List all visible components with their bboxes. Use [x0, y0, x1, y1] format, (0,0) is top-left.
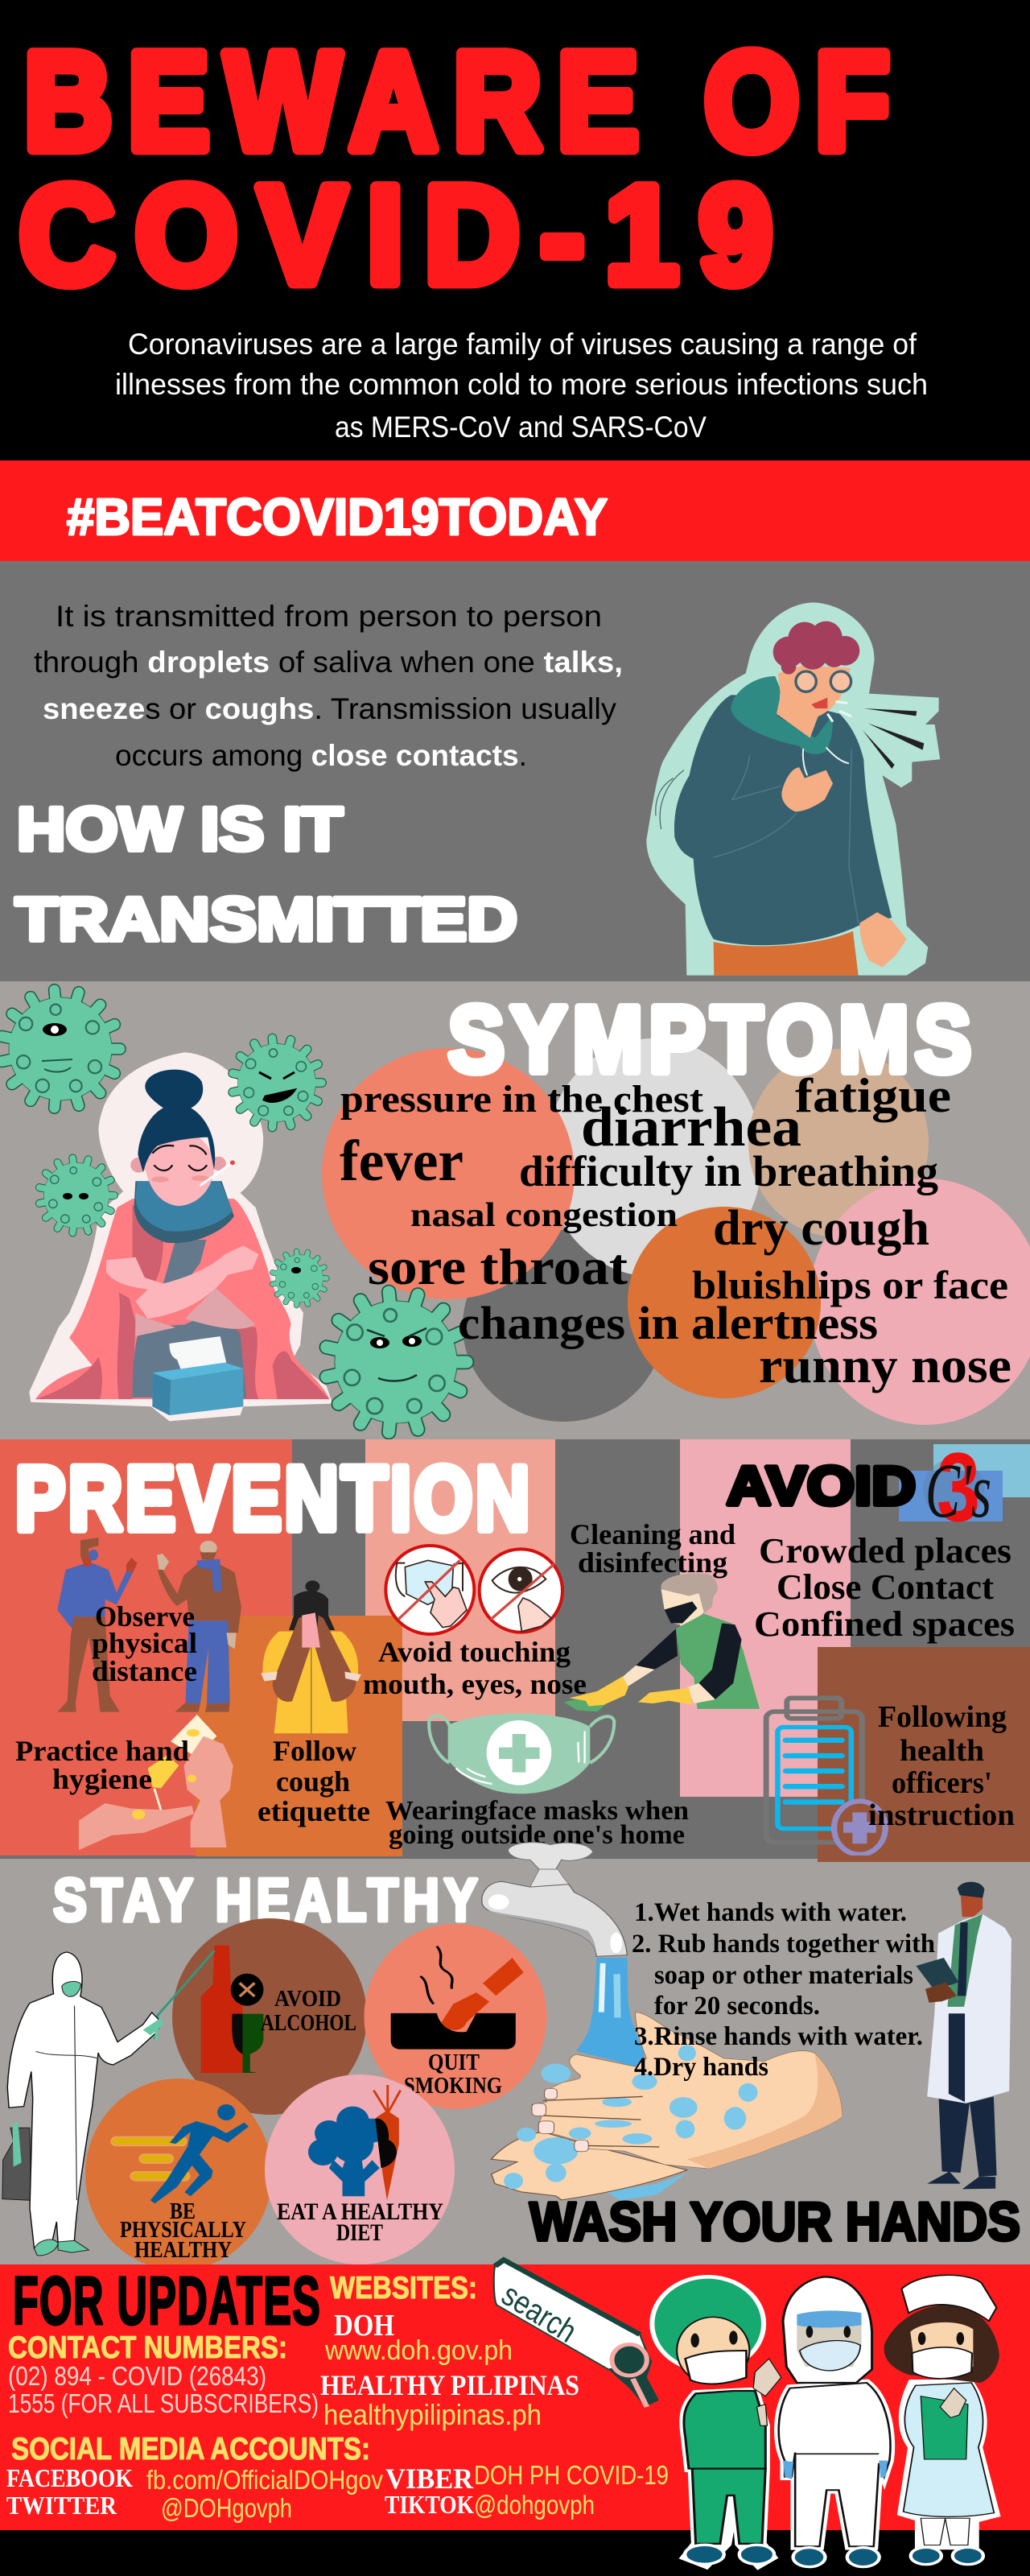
- symptom word cloud: dry cough: [713, 1201, 929, 1256]
- symptom word cloud: diarrhea: [581, 1096, 801, 1158]
- websites: healthypilipinas.ph: [323, 2398, 542, 2431]
- prevention labels: physical: [92, 1627, 197, 1659]
- prevention labels: mouth, eyes, nose: [363, 1668, 587, 1700]
- websites: [320, 2271, 579, 2431]
- heading: symptoms: SYMPTOMS: [448, 988, 971, 1092]
- illustration: doctor in lab coat: [916, 1882, 1011, 2189]
- heading: for updates: FOR UPDATES: [13, 2263, 320, 2339]
- social media accounts: FACEBOOK: [6, 2463, 133, 2492]
- icon: do not touch eyes: [480, 1549, 562, 1633]
- prevention labels: disinfecting: [578, 1546, 727, 1579]
- heading: how is it transmitted: HOW IS IT: [17, 795, 343, 864]
- social media accounts: SOCIAL MEDIA ACCOUNTS:: [11, 2432, 370, 2467]
- symptom word cloud: fatigue: [795, 1069, 951, 1122]
- transmission text block: It is transmitted from person to person: [56, 600, 602, 633]
- heading: avoid 3 Cs: AVOID: [727, 1455, 916, 1517]
- hand washing steps: [632, 1898, 935, 2082]
- social media accounts: @dohgovph: [474, 2490, 595, 2520]
- panel: stay healthy: [0, 1843, 1030, 2270]
- social media accounts: TWITTER: [6, 2491, 117, 2520]
- prevention labels: cough: [276, 1765, 350, 1798]
- transmission text block: sneezes or coughs. Transmission usually: [43, 692, 617, 725]
- title: BEWARE OF: [24, 24, 889, 179]
- hashtag banner: #BEATCOVID19TODAY: [67, 488, 608, 546]
- prevention labels: Close Contact: [777, 1567, 994, 1607]
- contact numbers: 1555 (FOR ALL SUBSCRIBERS): [8, 2388, 319, 2418]
- heading: how is it transmitted: [15, 795, 517, 954]
- prevention labels: etiquette: [258, 1795, 370, 1827]
- circle: avoid alcohol: ALCOHOL: [261, 2011, 356, 2036]
- illustration: viruses: [2, 990, 467, 1432]
- illustration: cleaner wiping table: [563, 1573, 760, 1711]
- illustration: coughing man: [646, 602, 940, 976]
- panel: prevention: [0, 1432, 1030, 1862]
- illustration: white PPE suit medic: [779, 2277, 890, 2567]
- illustration: face mask: [429, 1714, 614, 1794]
- circle: be physically healthy: PHYSICALLY: [120, 2218, 246, 2243]
- prevention labels: going outside one's home: [389, 1820, 685, 1850]
- illustration: two people distancing: [57, 1538, 241, 1712]
- illustration: nurse: [884, 2275, 999, 2565]
- symptom word cloud: bluishlips or face: [692, 1262, 1008, 1307]
- social media accounts: TIKTOK: [385, 2490, 474, 2519]
- illustration: clipboard with medical cross: [766, 1698, 885, 1855]
- social media accounts: [6, 2432, 669, 2523]
- illustration: faucet with running water: [482, 1843, 645, 2070]
- intro text block: as MERS-CoV and SARS-CoV: [335, 411, 707, 444]
- icon: do not touch face mask: [385, 1546, 474, 1634]
- contact numbers: (02) 894 - COVID (26843): [8, 2361, 266, 2391]
- prevention labels: Confined spaces: [754, 1604, 1015, 1644]
- heading: avoid 3 Cs: [727, 1432, 991, 1542]
- title: [19, 24, 889, 312]
- hashtag banner: [0, 460, 1030, 561]
- prevention labels: instruction: [868, 1798, 1015, 1832]
- hand washing steps: for 20 seconds.: [654, 1992, 820, 2021]
- prevention labels: Practice hand: [15, 1735, 189, 1767]
- social media accounts: fb.com/OfficialDOHgov: [146, 2465, 383, 2495]
- panel: for updates: [0, 2260, 1030, 2576]
- icon: search bar with magnifier: search: [496, 2277, 583, 2350]
- title: COVID-19: [19, 157, 772, 312]
- hand washing steps: 3.Rinse hands with water.: [634, 2022, 923, 2051]
- heading: avoid 3 Cs: 3: [937, 1432, 980, 1542]
- intro text block: Coronaviruses are a large family of viruses causing a range of: [128, 328, 917, 361]
- icon: search bar with magnifier: [494, 2260, 659, 2407]
- transmission text block: occurs among close contacts.: [115, 739, 527, 772]
- intro text block: illnesses from the common cold to more serious infections such: [115, 368, 928, 401]
- symptom word cloud: pressure in the chest: [340, 1078, 703, 1121]
- prevention labels: officers': [892, 1766, 992, 1800]
- symptom word cloud: changes in alertness: [458, 1297, 878, 1349]
- symptom word cloud: [340, 1069, 1011, 1393]
- circle: eat a healthy diet: [265, 2074, 455, 2264]
- prevention labels: [15, 1518, 1015, 1850]
- circle: quit smoking: QUIT: [428, 2050, 480, 2075]
- social media accounts: @DOHgovph: [161, 2493, 292, 2523]
- panel: symptoms: [0, 981, 1030, 1441]
- prevention labels: Follow: [273, 1735, 356, 1767]
- symptom word cloud: runny nose: [759, 1339, 1011, 1393]
- websites: DOH: [334, 2309, 394, 2343]
- illustration: hand sanitizer hands: [79, 1715, 233, 1850]
- hand washing steps: soap or other materials: [654, 1961, 913, 1990]
- illustration: sick woman: [29, 1052, 332, 1421]
- illustration: woman coughing into tissue: [261, 1580, 361, 1733]
- circle: eat a healthy diet: DIET: [336, 2219, 383, 2246]
- heading: avoid 3 Cs: C's: [925, 1447, 991, 1534]
- circle: eat a healthy diet: EAT A HEALTHY: [277, 2198, 443, 2225]
- contact numbers: CONTACT NUMBERS:: [8, 2330, 287, 2365]
- circle: be physically healthy: HEALTHY: [134, 2238, 232, 2263]
- prevention labels: Crowded places: [759, 1531, 1011, 1571]
- websites: www.doh.gov.ph: [324, 2335, 513, 2366]
- circle: quit smoking: [364, 1924, 547, 2109]
- intro text block: [115, 328, 928, 444]
- illustration: green scrubs doctor: [652, 2277, 781, 2566]
- transmission text block: [34, 600, 623, 772]
- heading: how is it transmitted: TRANSMITTED: [15, 886, 517, 954]
- prevention labels: distance: [92, 1655, 197, 1687]
- social media accounts: VIBER: [385, 2462, 474, 2495]
- hand washing steps: 2. Rub hands together with: [632, 1930, 935, 1959]
- prevention labels: Wearingface masks when: [385, 1796, 689, 1826]
- prevention labels: Avoid touching: [378, 1636, 571, 1668]
- prevention labels: hygiene: [52, 1763, 152, 1795]
- panel: how is it transmitted: [0, 561, 1030, 981]
- heading: stay healthy: STAY HEALTHY: [53, 1866, 478, 1934]
- illustration: hands washing: [492, 2013, 843, 2201]
- panel: header background: [0, 0, 1030, 460]
- prevention labels: Following: [878, 1700, 1007, 1734]
- websites: HEALTHY PILIPINAS: [320, 2369, 579, 2401]
- circle: quit smoking: SMOKING: [404, 2074, 502, 2099]
- hand washing steps: 4.Dry hands: [634, 2053, 768, 2082]
- symptom circles: [322, 1038, 1030, 1425]
- symptom word cloud: nasal congestion: [410, 1197, 678, 1234]
- contact numbers: [8, 2330, 319, 2418]
- symptom word cloud: fever: [340, 1129, 464, 1193]
- symptom word cloud: sore throat: [368, 1238, 628, 1295]
- heading: prevention: PREVENTION: [15, 1448, 529, 1549]
- symptom word cloud: difficulty in breathing: [519, 1147, 938, 1195]
- social media accounts: DOH PH COVID-19: [474, 2460, 669, 2490]
- circle: avoid alcohol: [172, 1918, 367, 2115]
- prevention labels: Cleaning and: [570, 1518, 735, 1550]
- prevention labels: health: [900, 1734, 984, 1768]
- circle: be physically healthy: BE: [170, 2199, 196, 2224]
- websites: WEBSITES:: [330, 2271, 477, 2306]
- hand washing steps: 1.Wet hands with water.: [634, 1898, 907, 1927]
- illustration: hazmat suit worker: [2, 1951, 214, 2256]
- circle: be physically healthy: [85, 2079, 272, 2270]
- prevention labels: Observe: [95, 1600, 195, 1633]
- transmission text block: through droplets of saliva when one talks,: [34, 646, 623, 679]
- circle: avoid alcohol: AVOID: [274, 1987, 341, 2012]
